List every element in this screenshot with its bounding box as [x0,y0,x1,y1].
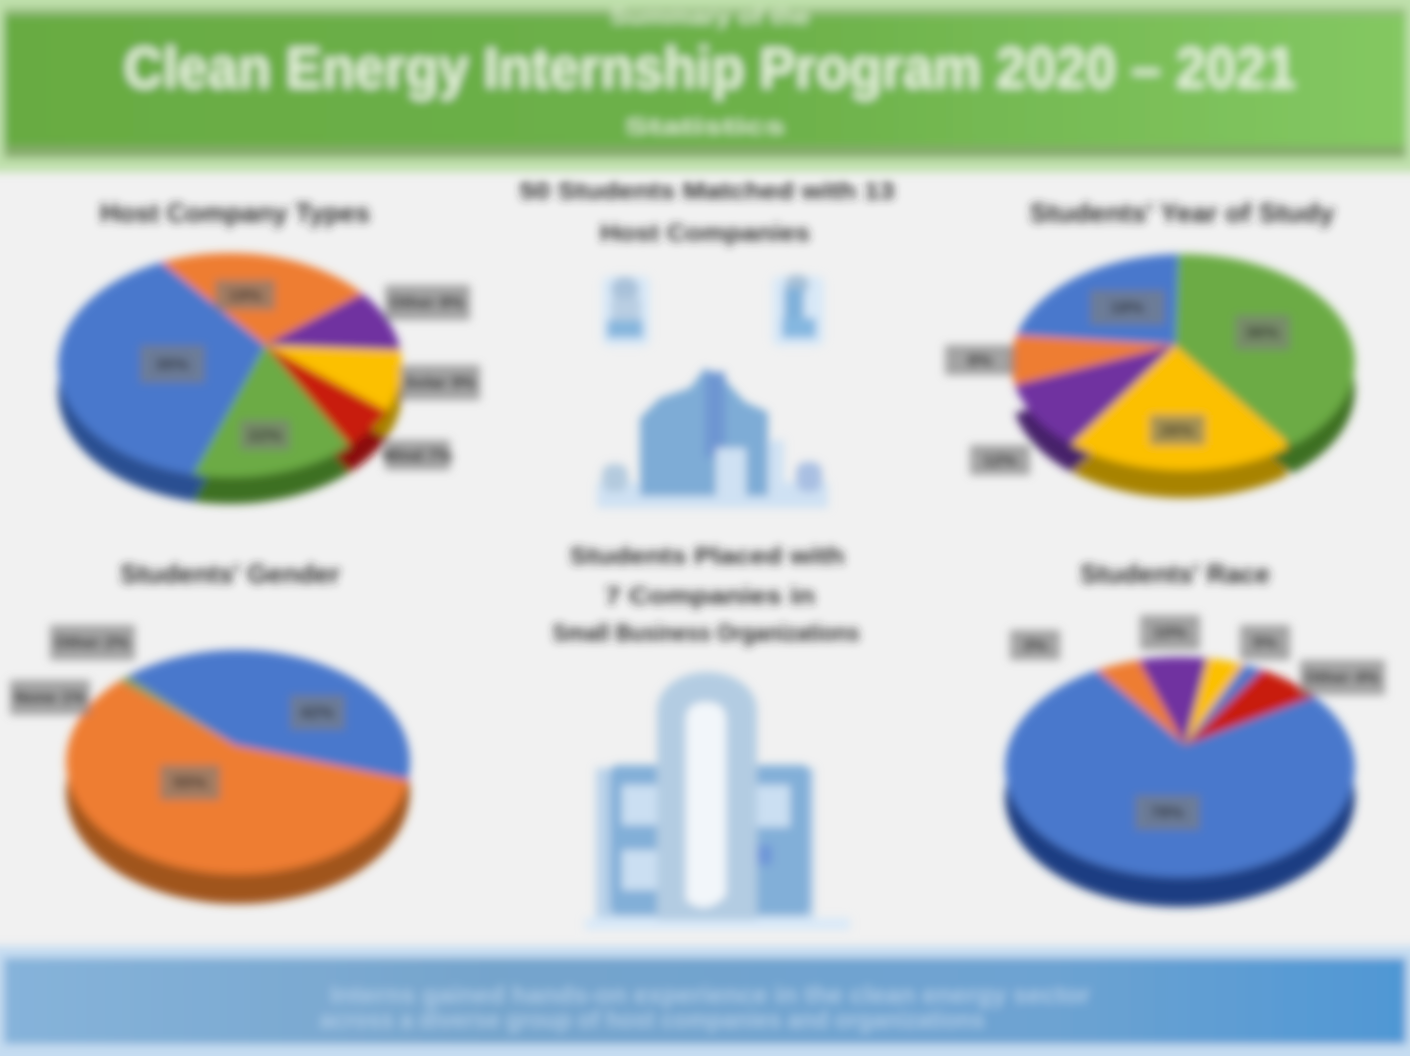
label: purple slice: 10% [1153,623,1187,642]
label: orange slice: 19% [228,286,262,305]
label: green slice: 22% [248,426,282,445]
label: yellow slice [400,365,480,400]
label: yellow slice [1240,625,1290,660]
label: yellow slice: Solar 9% [404,373,476,392]
icon: small office building [597,368,828,508]
heading: host company types: Host Company Types [100,198,370,228]
label: blue slice: 18% [1110,298,1144,317]
label: blue slice: 35% [155,355,189,374]
label: undisclosed slice [10,680,90,715]
label: orange slice [1010,630,1060,660]
label: orange slice: 3% [1023,636,1047,655]
footer banner [0,946,1410,1056]
heading: placement line three: Small Business Organizations [552,620,860,647]
label: purple slice [385,285,470,320]
pie chart: students gender [4,620,418,912]
label: red slice: Other 4% [1305,668,1379,687]
label: orange slice [215,280,275,310]
label: yellow slice [1150,415,1205,445]
label: green slice [240,420,290,450]
label: green slice [1235,315,1290,350]
heading: students placed: 50 Students Matched with 13 [520,178,894,205]
label: yellow slice: 26% [1160,421,1194,440]
label: blue slice [1090,290,1165,325]
heading: students gender: Students' Gender [120,559,340,589]
footer text line one: Interns gained hands-on experience in the clean energy sector [330,982,1090,1009]
heading: students year of study: Students' Year of Study [1030,198,1334,228]
label: purple slice: 12% [983,451,1017,470]
label: other slice [50,625,135,660]
label: yellow slice: 5% [1253,633,1277,652]
label: blue slice [290,695,345,730]
heading: students placed line two: Host Companies [600,220,810,247]
header eyebrow: Summary of the [610,4,810,29]
label: green slice: 36% [1245,323,1279,342]
label: blue slice: 42% [300,703,334,722]
header banner [0,0,1410,172]
header title: Clean Energy Internship Program 2020 – 2021 [124,36,1296,101]
label: orange slice [945,345,1015,375]
heading: students race: Students' Race [1080,559,1270,589]
pie chart: students race [990,615,1385,920]
label: other slice: Other 2% [55,633,129,652]
label: purple slice [970,445,1030,475]
label: purple slice: Other 8% [390,293,464,312]
icon: large campus building [585,672,850,930]
footer text line two: across a diverse group of host companies and organizations [320,1007,984,1034]
label: red slice [382,440,452,470]
label: orange slice: 55% [173,773,207,792]
icon: right student [772,275,824,346]
label: orange slice [160,765,220,800]
label: orange slice: 8% [968,351,992,370]
heading: placement line one: Students Placed with [570,543,844,570]
label: blue slice [1135,795,1200,830]
icon: left student [602,276,650,346]
label: undisclosed slice: None 1% [14,688,86,707]
label: blue slice [140,345,205,383]
label: red slice [1300,660,1385,695]
pie chart: students year of study [940,247,1362,506]
label: blue slice: 78% [1150,803,1184,822]
pie chart: host company types [50,246,486,512]
label: purple slice [1140,615,1200,650]
heading: placement line two: 7 Companies in [605,583,815,610]
header subtitle: Statistics [625,114,785,139]
label: red slice: Wind 7% [382,446,452,465]
